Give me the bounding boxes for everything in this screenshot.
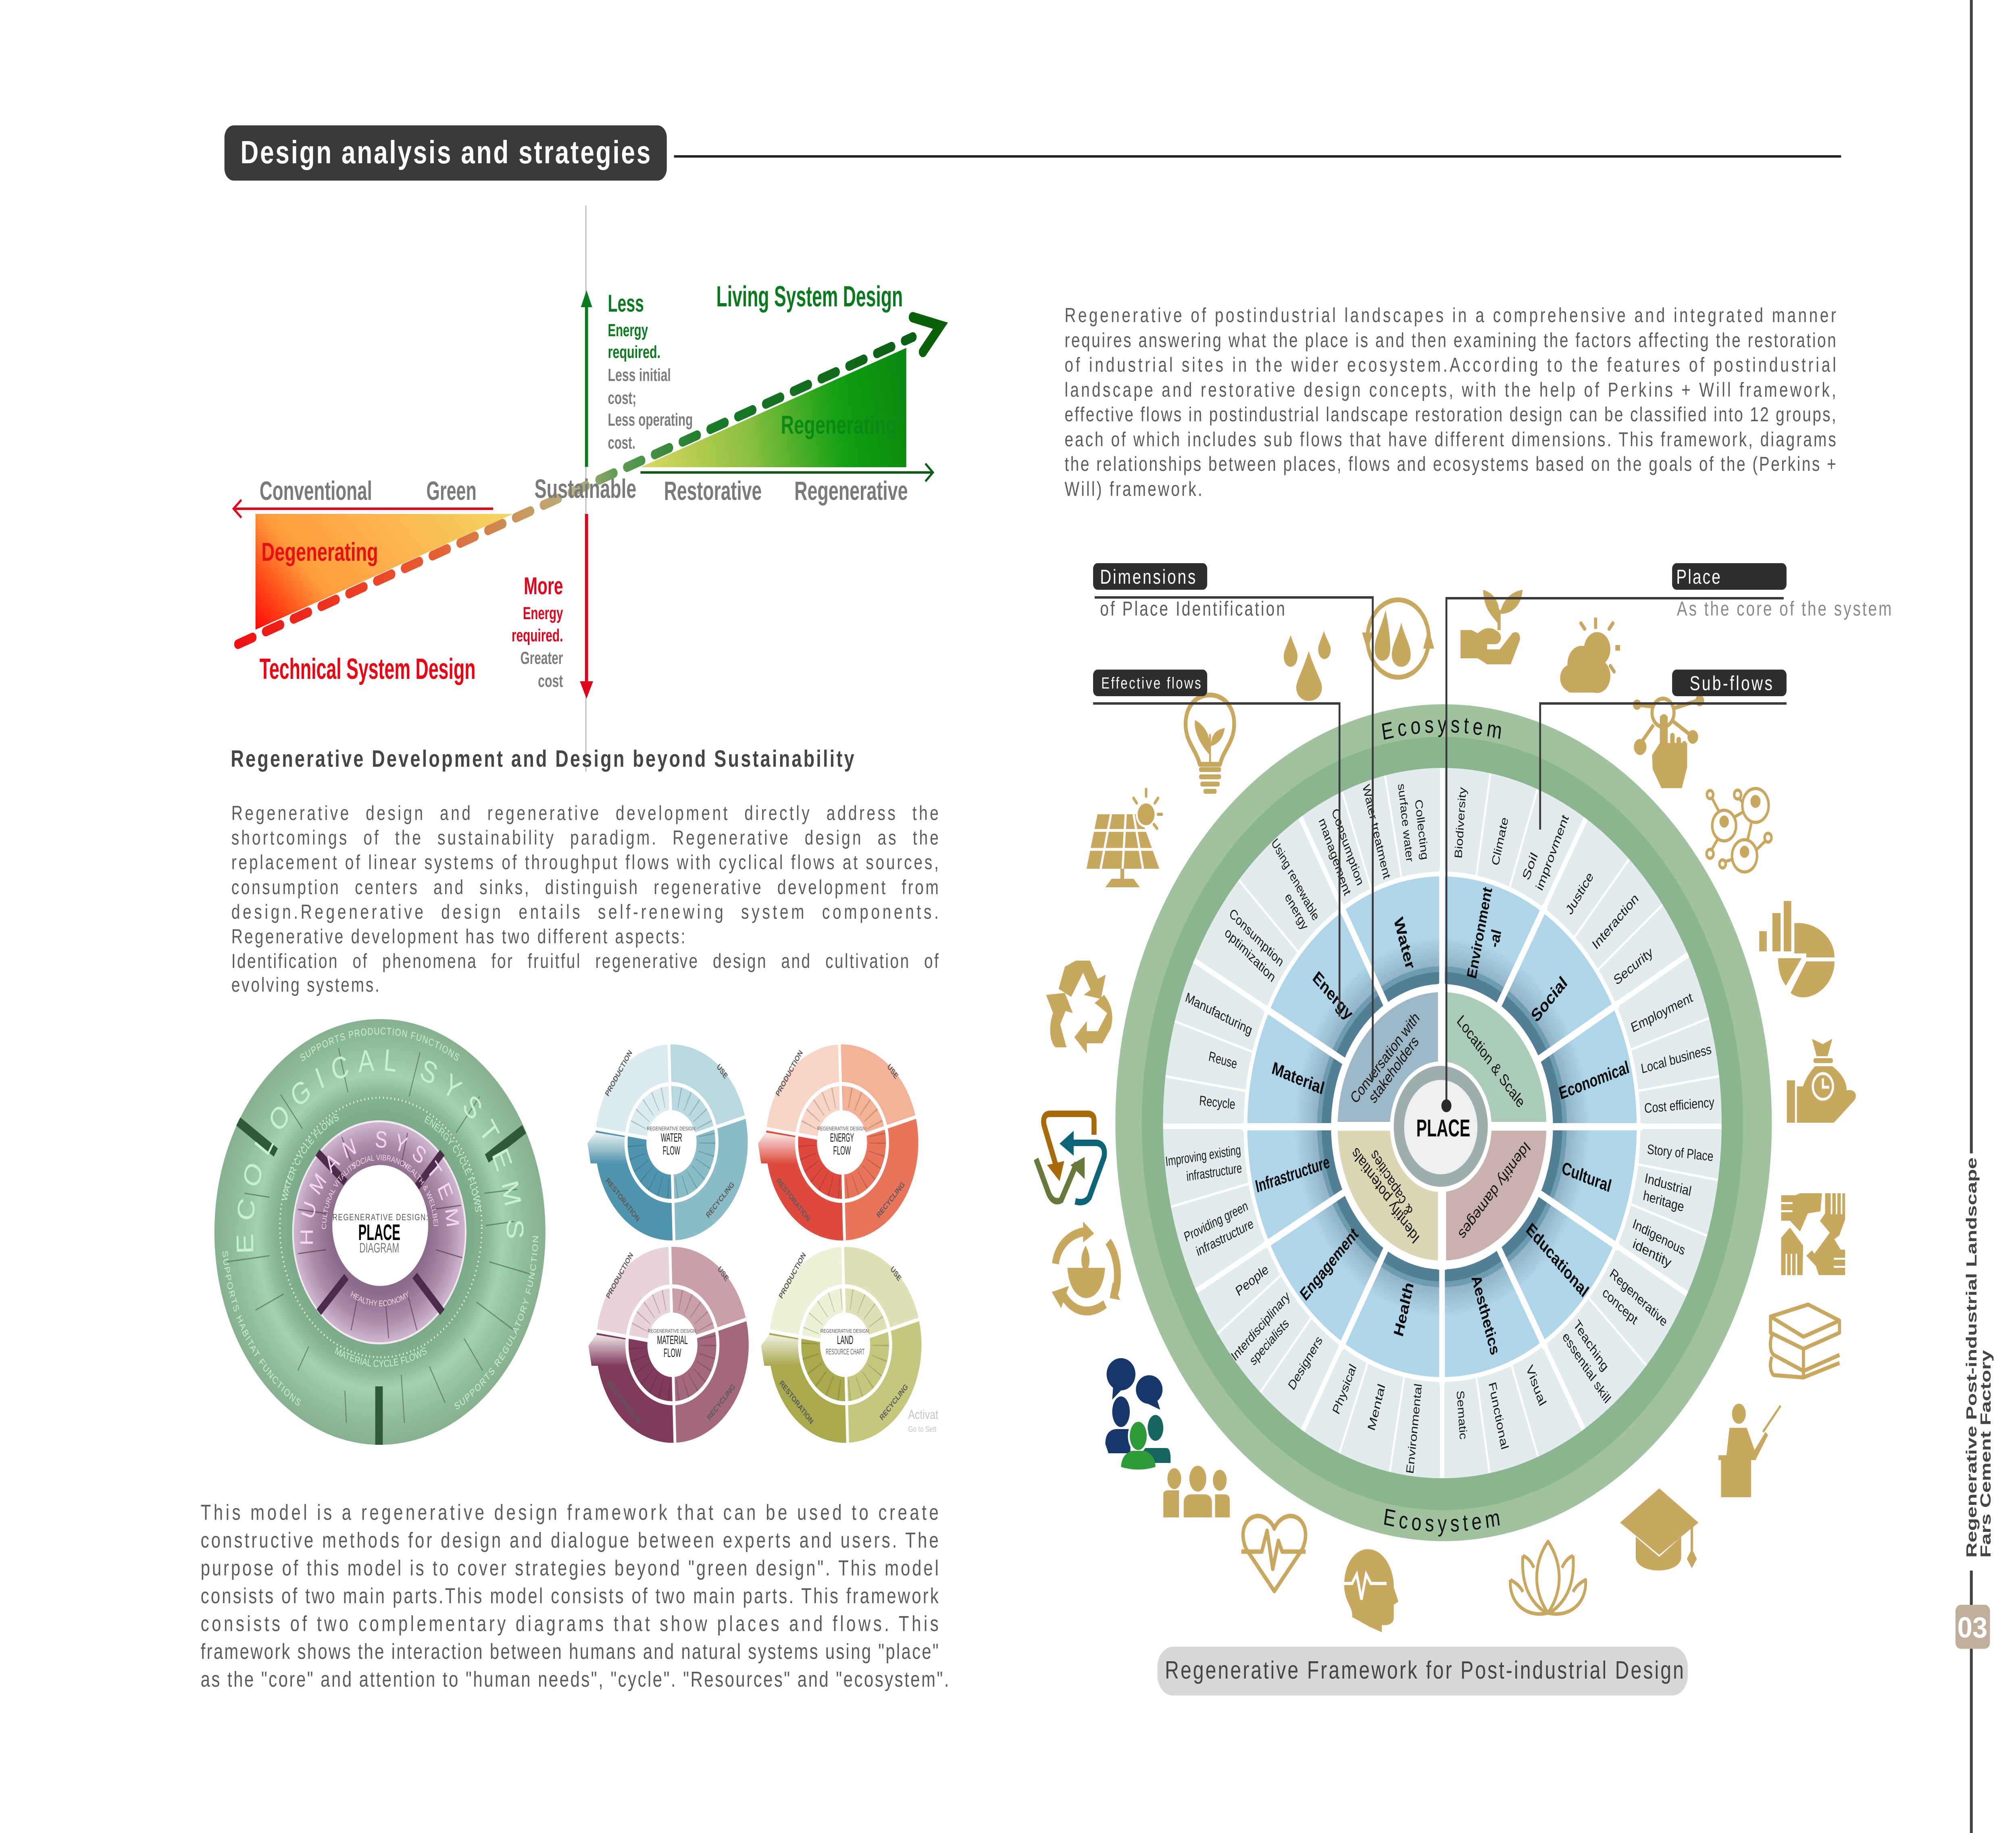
icon: head with pulse	[1335, 1549, 1398, 1632]
flows ring	[1241, 869, 1643, 1385]
sub-flow labels: Local business	[1640, 1041, 1712, 1077]
text block: less energy: Less operating	[608, 410, 693, 430]
dimension labels: Location & Scale	[1454, 1012, 1528, 1111]
callout: dimensions	[1093, 563, 1285, 620]
wheel labels: USE	[715, 1062, 729, 1080]
wheel labels: RECYCLING	[706, 1382, 737, 1422]
wheel labels: RESOURCE CHART	[826, 1347, 864, 1356]
green regenerating triangle	[640, 348, 906, 467]
sub-flow labels: concept	[1600, 1285, 1640, 1328]
sidebar title	[1964, 1157, 1994, 1558]
caption pill	[1157, 1647, 1688, 1696]
human ring labels: HEALTHY ECONOMY	[350, 1290, 410, 1308]
wheel labels: FLOW	[833, 1144, 851, 1157]
sub-flow labels: Cost efficiency	[1644, 1094, 1715, 1116]
text block: more energy: required.	[512, 626, 563, 645]
chart: place diagram	[0, 0, 546, 1445]
icon: lotus	[1510, 1542, 1586, 1614]
sub-flow labels: Reuse	[1208, 1049, 1238, 1072]
axis labels: Restorative	[664, 476, 762, 506]
text block: framework introduction: landscape and restorative design concepts, with the help of Perkins + Will framework,	[1064, 379, 1836, 401]
flow labels	[1254, 885, 1631, 1357]
text block: model description	[201, 1500, 949, 1692]
dimension labels: & capacities	[1367, 1147, 1416, 1219]
callout: place	[1672, 563, 1891, 620]
centre label: REGENERATIVE DESIGN:	[332, 1213, 429, 1223]
section title: Design analysis and strategies	[240, 135, 650, 171]
ecosystem outer ring	[1115, 704, 1772, 1541]
sub-flow labels: Interdisciplinary	[1229, 1288, 1292, 1364]
sub-flow labels: specialists	[1248, 1315, 1291, 1369]
axis labels: Conventional	[260, 476, 372, 506]
icon: money bag in hand	[1787, 1039, 1856, 1123]
dimension labels	[1348, 1009, 1533, 1247]
wheel labels: PRODUCTION	[774, 1049, 804, 1098]
text block: regenerative design paragraph: Regenerative design and regenerative development directly address the	[231, 802, 939, 824]
icon: lamp in cycle	[1052, 1221, 1120, 1311]
wheel labels: USE	[886, 1062, 900, 1080]
dimension labels: Conversation with	[1348, 1009, 1422, 1107]
text block: framework introduction	[1064, 304, 1836, 500]
sub-flow labels: Physical	[1330, 1362, 1359, 1417]
dotted flow ring	[280, 1098, 482, 1357]
dimensions ring	[1331, 984, 1553, 1270]
callout: effective flows	[1093, 670, 1207, 696]
label: ecological systems: ECOLOGICAL SYSTEMS	[231, 1042, 528, 1255]
sub-flow labels: Recycle	[1199, 1093, 1236, 1112]
text block: framework introduction: effective flows in postindustrial landscape restoration design can be classified into 12 groups,	[1064, 403, 1836, 426]
text block: less energy: cost.	[608, 433, 635, 453]
icon: chart	[1759, 901, 1835, 997]
text block: framework introduction: each of which includes sub flows that have different dimensions. This framework, diagrams	[1064, 428, 1836, 451]
sub-flow labels: Interaction	[1590, 890, 1641, 953]
chart: regenerative framework wheel	[1115, 704, 1772, 1541]
axis labels: Sustainable	[535, 474, 636, 504]
wheel labels: RECYCLING	[875, 1180, 906, 1220]
purple human systems ring	[292, 1120, 467, 1344]
ring labels: SUPPORTS PRODUCTION FUNCTIONS	[298, 1026, 462, 1064]
icon: graduation cap	[1620, 1488, 1698, 1571]
sidebar title: Fars Cement Factory	[1978, 1350, 1994, 1558]
chart: energy flow wheel	[758, 1044, 918, 1240]
text block: less energy: cost;	[608, 388, 636, 408]
wheel labels	[604, 1049, 736, 1223]
chart: water flow wheel	[587, 1044, 748, 1240]
sub-flow labels: Environmental	[1404, 1383, 1425, 1475]
sub-flow labels: Providing green	[1182, 1198, 1250, 1245]
text block: more energy: Energy	[523, 603, 563, 623]
icon: eco light bulb	[1185, 695, 1234, 794]
sub-flow labels: Story of Place	[1647, 1142, 1714, 1164]
chart: land resource wheel	[761, 1247, 921, 1443]
sub-flow labels: Industrial	[1643, 1170, 1693, 1199]
flow labels: Infrastructure	[1254, 1152, 1331, 1196]
text block: model description: as the "core" and attention to "human needs", "cycle". "Resources" and "ecosystem".	[201, 1667, 949, 1692]
sub-flow labels	[1165, 782, 1715, 1475]
sub-flow labels: Water treatment	[1360, 783, 1393, 881]
text block: regenerative design paragraph	[231, 802, 939, 996]
sub-flow labels: infrastructure	[1194, 1216, 1255, 1259]
sub-flow labels: identity	[1631, 1236, 1673, 1271]
icon: people network	[1707, 789, 1772, 872]
text block: model description: consists of two main parts.This model consists of two main parts. This framework	[201, 1584, 939, 1608]
text block: model description: constructive methods for design and dialogue between experts and users. The	[201, 1528, 939, 1552]
sidebar title: Regenerative Post-industrial Landscape	[1964, 1157, 1980, 1558]
sub-flow labels: energy	[1283, 890, 1311, 933]
text block: framework introduction: requires answering what the place is and then examining the factors affecting the restoration	[1064, 329, 1836, 352]
page number: 03	[1958, 1611, 1987, 1644]
icon: hand with plant	[1460, 590, 1522, 664]
sub-flow labels: Indigenous	[1631, 1216, 1687, 1258]
callout: place: As the core of the system	[1677, 597, 1891, 620]
sub-flow labels: Security	[1612, 944, 1655, 988]
ring labels: MATERIAL CYCLE FLOWS	[333, 1345, 428, 1369]
watermark text: Go to Sett	[908, 1425, 936, 1434]
human ring labels: HEALTH & WELLBEING	[0, 0, 439, 1227]
callout: dimensions: of Place Identification	[1100, 597, 1285, 620]
dimension labels: Identify potentials	[1348, 1144, 1422, 1247]
ring labels: SUPPORTS HABITAT FUNCTIONS	[221, 1250, 303, 1409]
text block: model description: consists of two complementary diagrams that show places and flows. This	[201, 1612, 939, 1636]
text block: less energy: required.	[608, 342, 660, 362]
ring labels: WATER CYCLE FLOWS	[280, 1111, 340, 1202]
text block: more energy: Greater	[521, 648, 563, 668]
sub-flow labels: heritage	[1642, 1188, 1685, 1215]
text block: regenerative design paragraph: replacement of linear systems of throughput flows with cyclical flows at sources,	[231, 851, 939, 874]
wheel labels: RESTORATION	[604, 1176, 641, 1223]
sub-flow labels: Teaching	[1571, 1317, 1611, 1374]
flow labels: Cultural	[1560, 1158, 1613, 1196]
text block: model description: purpose of this model is to cover strategies beyond "green design". This model	[201, 1556, 939, 1580]
marker: place dot	[1441, 1099, 1452, 1112]
watermark text	[908, 1408, 938, 1434]
icon: three people	[1163, 1466, 1230, 1517]
page number	[1956, 1605, 1990, 1649]
sub-flow labels: Using renewable	[1269, 836, 1322, 924]
wheel labels: FLOW	[664, 1346, 681, 1360]
label: technical system design: Technical System Design	[260, 653, 475, 685]
flow labels: Social	[1528, 973, 1570, 1026]
wheel labels: PRODUCTION	[605, 1251, 635, 1300]
sub-flow labels: Soil	[1520, 850, 1540, 882]
sub-flow labels: optimization	[1223, 925, 1278, 985]
icon: water drops	[1284, 631, 1331, 701]
wheel labels: LAND	[837, 1333, 853, 1347]
icon: heart pulse	[1241, 1516, 1306, 1591]
text block: more energy: More	[524, 572, 563, 599]
text block: framework introduction: Will) framework.	[1064, 478, 1202, 500]
wheel labels: REGENERATIVE DESIGN:	[817, 1126, 867, 1132]
sub-flow labels: surface water	[1395, 782, 1416, 863]
sub-flow labels: Employment	[1629, 990, 1695, 1036]
label: regenerating: Regenerating	[781, 411, 897, 440]
sub-flow labels: People	[1233, 1261, 1270, 1299]
wheel labels: MATERIAL	[657, 1333, 688, 1347]
label: ecosystem bottom: Ecosystem	[1382, 1504, 1505, 1537]
text block: regenerative design paragraph: design.Regenerative design entails self-renewing system components.	[231, 901, 939, 923]
wheel labels	[774, 1049, 906, 1223]
sub-flow labels: Consumption	[1329, 806, 1366, 888]
text block: regenerative design paragraph: shortcomings of the sustainability paradigm. Regenerative design as the	[231, 826, 939, 849]
sub-flow labels: improvment	[1533, 812, 1571, 893]
wheel labels: RESTORATION	[775, 1176, 812, 1223]
arrow: more energy	[580, 514, 593, 699]
sub-flow labels: Climate	[1489, 816, 1511, 867]
wheel labels: FLOW	[663, 1144, 681, 1157]
text block: regenerative design paragraph: evolving systems.	[231, 974, 379, 996]
heading: regenerative development: Regenerative Development and Design beyond Sustainability	[231, 746, 854, 772]
section title	[225, 125, 667, 181]
flow labels: Educational	[1523, 1219, 1592, 1301]
flow labels: Health	[1391, 1280, 1417, 1339]
centre label: DIAGRAM	[359, 1240, 399, 1256]
dimension labels: Identify dameges	[1456, 1138, 1533, 1243]
text block: model description: This model is a regenerative design framework that can be used to create	[201, 1500, 939, 1525]
flow labels: Aesthetics	[1468, 1273, 1503, 1357]
human ring labels: SOCIAL VIBRANCY	[350, 1153, 410, 1171]
sub-flow labels: Justice	[1563, 869, 1596, 918]
label: ecosystem top: Ecosystem	[1380, 712, 1507, 745]
arrow: dashed system trajectory	[238, 317, 940, 644]
sub-flow labels: essential skill	[1560, 1329, 1613, 1406]
label: degenerating: Degenerating	[261, 538, 378, 567]
chart: regenerative development diagram	[233, 206, 940, 772]
icon: joined hands	[1781, 1193, 1845, 1275]
arrow: left axis	[233, 500, 493, 518]
watermark text: Activat	[908, 1408, 938, 1422]
leader lines	[1093, 597, 1787, 1106]
text block: regenerative design paragraph: Identification of phenomena for fruitful regenerative design and cultivation of	[231, 950, 939, 972]
dimension labels: stakeholders	[1366, 1032, 1421, 1107]
text block: less energy: Energy	[608, 320, 648, 340]
icon: solar panel	[1087, 789, 1162, 887]
text block: more energy: cost	[538, 671, 563, 691]
icon: books	[1770, 1305, 1839, 1377]
wheel labels: REGENERATIVE DESIGN:	[821, 1328, 870, 1334]
flow labels: Energy	[1310, 967, 1356, 1024]
sub-flow labels: management	[1316, 816, 1354, 898]
axis labels	[260, 474, 908, 506]
wheel labels: ENERGY	[830, 1131, 854, 1144]
text block: framework introduction: of industrial sites in the wider ecosystem.According to the features of postindustrial	[1064, 354, 1836, 376]
sub-flows ring	[1154, 755, 1731, 1497]
sub-flow labels: Functional	[1486, 1380, 1511, 1451]
chart: material flow wheel	[588, 1247, 749, 1443]
sub-flow labels: Designers	[1286, 1333, 1325, 1393]
red degenerating triangle	[256, 514, 513, 630]
text block: less energy	[608, 290, 693, 453]
ring labels: SUPPORTS REGULATORY FUNCTIONS	[0, 0, 540, 1412]
icon: sun and cloud	[1559, 618, 1620, 693]
wheel labels: PRODUCTION	[777, 1251, 807, 1300]
text block: framework introduction: the relationships between places, flows and ecosystems based on the goals of the (Perkins +	[1064, 453, 1836, 475]
callout: effective flows: Effective flows	[1101, 674, 1201, 692]
centre label: PLACE	[358, 1220, 400, 1245]
text block: model description: framework shows the interaction between humans and natural systems using "place"	[201, 1640, 939, 1664]
sidebar rule	[1970, 0, 1973, 1833]
centre label	[332, 1213, 429, 1256]
callout: place: Place	[1676, 566, 1720, 588]
flow labels: -al	[1486, 928, 1504, 949]
wheel labels	[605, 1251, 737, 1426]
text block: less energy: Less	[608, 290, 644, 317]
flow labels: Environment	[1464, 885, 1495, 980]
wheel labels: PRODUCTION	[604, 1049, 633, 1098]
callout: sub-flows: Sub-flows	[1690, 672, 1772, 695]
wheel labels: WATER	[661, 1131, 682, 1144]
wheel labels: REGENERATIVE DESIGN:	[647, 1126, 696, 1132]
axis labels: Green	[426, 476, 477, 506]
wheel labels: RESTORATION	[605, 1379, 642, 1426]
icon: triple cycle arrows	[1036, 1114, 1104, 1202]
sub-flow labels: Improving existing	[1165, 1142, 1241, 1169]
wheel labels: USE	[716, 1265, 730, 1283]
sub-flow labels: Mental	[1365, 1382, 1388, 1432]
icon: touch network	[1633, 695, 1704, 788]
icon: group with speech bubbles	[1105, 1358, 1170, 1470]
dark green dividers	[238, 1121, 524, 1445]
sub-flow labels: Sematic	[1454, 1390, 1469, 1440]
flow labels: Engagement	[1297, 1224, 1361, 1305]
wheel labels: REGENERATIVE DESIGN:	[648, 1328, 697, 1334]
icon: teacher at podium	[1718, 1404, 1781, 1497]
wheel labels	[777, 1251, 909, 1426]
text block: framework introduction: Regenerative of postindustrial landscapes in a comprehensive and integrated manner	[1064, 304, 1836, 327]
ring labels: ENERGY CYCLE FLOWS	[423, 1113, 483, 1213]
sub-flow labels: Regenerative	[1608, 1266, 1670, 1329]
sub-flow labels: Visual	[1524, 1363, 1549, 1409]
text block: less energy: Less initial	[608, 365, 671, 385]
label: place centre: PLACE	[1416, 1115, 1470, 1142]
text block: more energy	[512, 572, 563, 691]
caption pill: Regenerative Framework for Post-industrial Design	[1165, 1656, 1684, 1684]
arrow: right axis	[640, 464, 933, 481]
sub-flow labels: infrastructure	[1186, 1160, 1243, 1184]
axis labels: Regenerative	[794, 476, 908, 506]
arrow: less energy	[581, 290, 592, 467]
callout: sub-flows	[1672, 670, 1787, 696]
sub-flow labels: Manufacturing	[1184, 990, 1254, 1038]
human ring labels: CULTURAL VITALITY	[321, 1160, 358, 1230]
flow labels: Water	[1391, 915, 1418, 972]
label: living system design: Living System Design	[716, 280, 903, 313]
wheel labels: USE	[889, 1265, 903, 1283]
text block: regenerative design paragraph: consumption centers and sinks, distinguish regenerative development from	[231, 876, 939, 899]
wheel labels: RECYCLING	[878, 1382, 909, 1422]
wheel labels: RECYCLING	[705, 1180, 736, 1220]
sub-flow labels: Collecting	[1412, 799, 1431, 861]
icon: water cycle	[1362, 600, 1434, 677]
sub-flow labels: Consumption	[1227, 905, 1286, 970]
sub-flow labels: Biodiversity	[1452, 786, 1468, 859]
wheel labels: RESTORATION	[778, 1379, 815, 1426]
flow labels: Economical	[1557, 1057, 1631, 1103]
flow labels: Material	[1270, 1058, 1326, 1099]
icon: recycle	[1046, 961, 1112, 1053]
decorative radial text ticks	[227, 1048, 530, 1423]
text block: regenerative design paragraph: Regenerative development has two different aspects:	[231, 925, 685, 948]
callout: dimensions: Dimensions	[1100, 566, 1195, 588]
